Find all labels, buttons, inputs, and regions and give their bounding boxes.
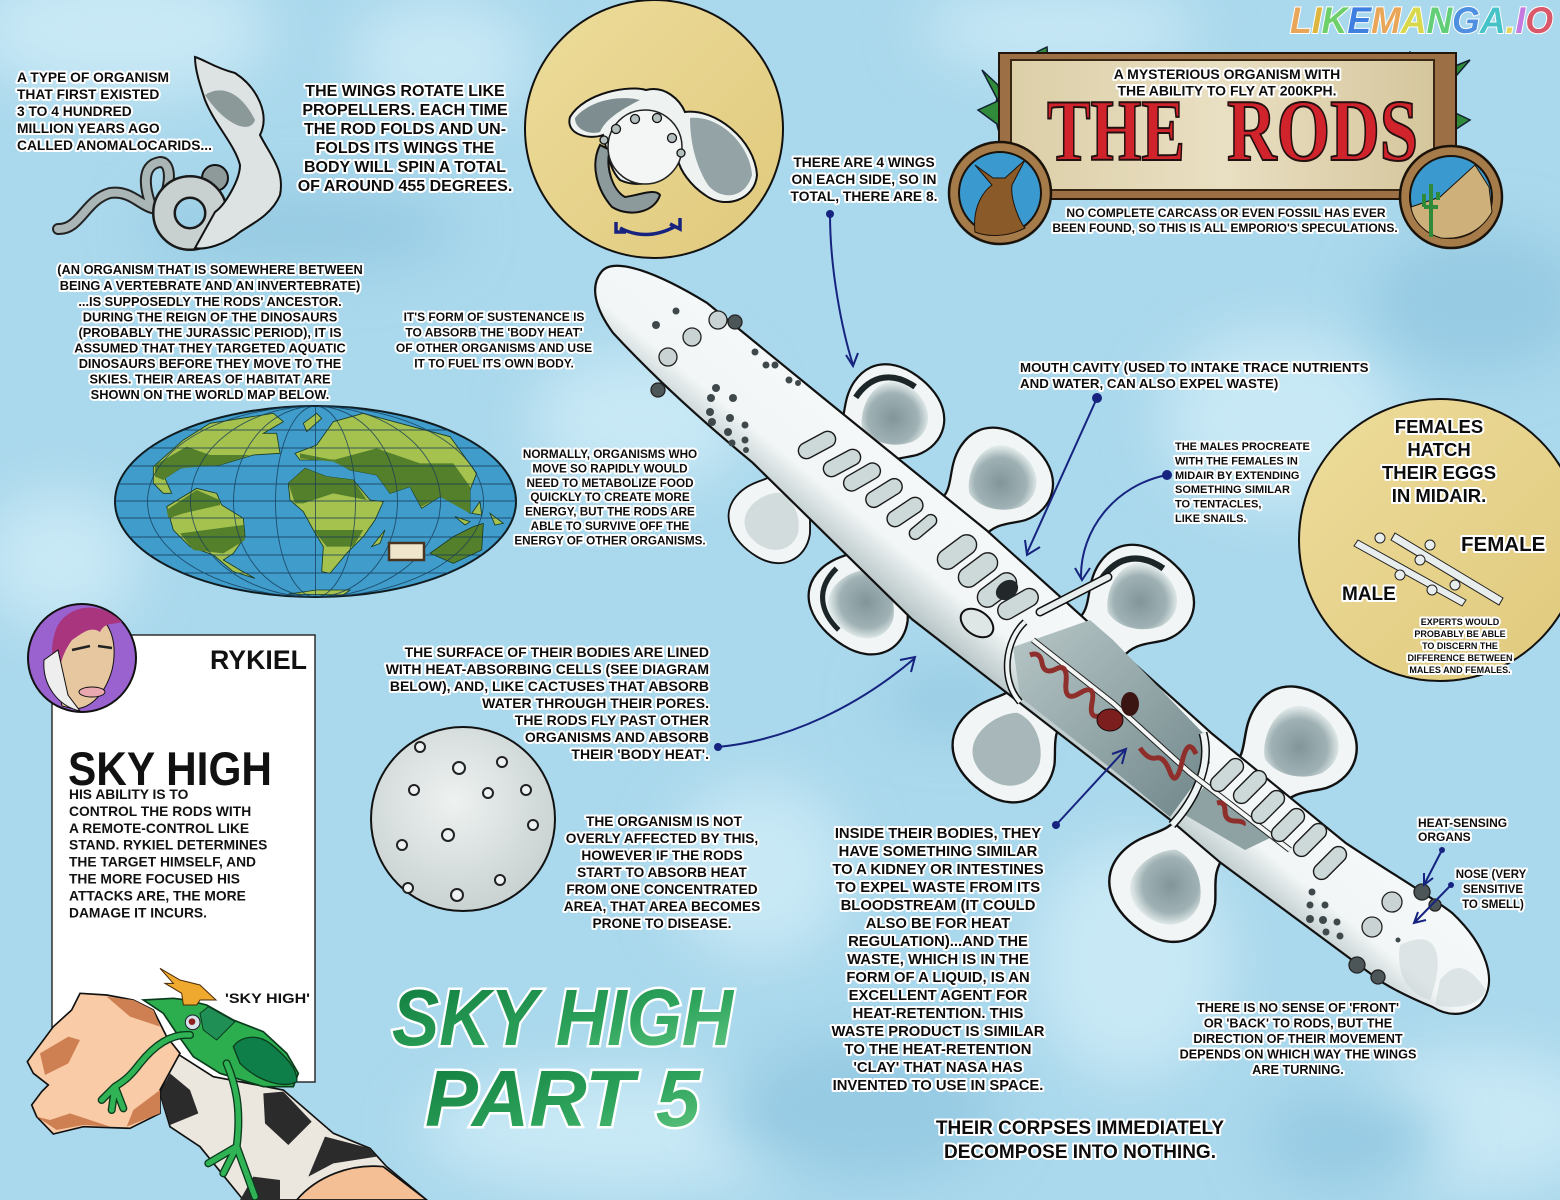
rod underside shading xyxy=(1399,939,1486,1007)
title: sky high part 5: SKY HIGH xyxy=(392,973,735,1062)
text: 4 wings: TOTAL, THERE ARE 8. xyxy=(791,189,937,204)
text: ancestor: DURING THE REIGN OF THE DINOSAURS xyxy=(83,310,338,324)
text: experts: PROBABLY BE ABLE xyxy=(1414,629,1506,639)
text: no complete carcass: BEEN FOUND, SO THIS IS ALL EMPORIO'S SPECULATIONS. xyxy=(1052,221,1398,235)
text: surface of bodies: THE RODS FLY PAST OTHER xyxy=(515,712,709,728)
text: inside bodies: HAVE SOMETHING SIMILAR xyxy=(839,844,1038,860)
arrow: inside xyxy=(1052,749,1126,829)
text: inside bodies: EXCELLENT AGENT FOR xyxy=(849,988,1028,1004)
text: sustenance: TO ABSORB THE 'BODY HEAT' xyxy=(405,326,583,340)
text: inside bodies: WASTE PRODUCT IS SIMILAR xyxy=(832,1024,1045,1040)
title: the rods: THE xyxy=(1047,83,1185,180)
text: ability: ATTACKS ARE, THE MORE xyxy=(69,888,246,903)
panel: females circle xyxy=(1299,399,1560,681)
heading: sky high: SKY HIGH xyxy=(68,742,272,795)
text: metabolism: ABLE TO SURVIVE OFF THE xyxy=(531,520,690,533)
text: surface of bodies: THE SURFACE OF THEIR BODIES ARE LINED xyxy=(405,644,709,660)
title: the rods: RODS xyxy=(1227,83,1418,180)
text: sustenance: IT'S FORM OF SUSTENANCE IS xyxy=(404,310,584,324)
text: wings rotate: FOLDS ITS WINGS THE xyxy=(316,140,495,157)
text: wings rotate: PROPELLERS. EACH TIME xyxy=(302,102,508,119)
title: the rods xyxy=(1047,83,1418,180)
rod wings and body xyxy=(497,163,1560,1128)
text: 4 wings: THERE ARE 4 WINGS xyxy=(793,155,935,170)
text: surface of bodies: THEIR 'BODY HEAT'. xyxy=(571,746,709,762)
fist xyxy=(27,993,180,1134)
text: disease: FROM ONE CONCENTRATED xyxy=(566,882,758,897)
text: disease: PRONE TO DISEASE. xyxy=(593,916,731,931)
map grid xyxy=(115,406,516,597)
text: metabolism: NEED TO METABOLIZE FOOD xyxy=(526,477,694,490)
text: corpses: THEIR CORPSES IMMEDIATELY xyxy=(936,1118,1224,1139)
sleeve xyxy=(160,1053,427,1200)
text: ancestor: DINOSAURS BEFORE THEY MOVE TO THE xyxy=(79,356,342,371)
wing: bottom 3 xyxy=(935,668,1087,821)
text: sustenance: OF OTHER ORGANISMS AND USE xyxy=(396,341,592,355)
text: males procreate: WITH THE FEMALES IN xyxy=(1175,455,1298,467)
world map xyxy=(115,406,516,597)
arrow: tentacles xyxy=(1075,470,1172,580)
arrow: surface xyxy=(714,657,915,751)
text: corpses: DECOMPOSE INTO NOTHING. xyxy=(944,1142,1216,1163)
text: metabolism: ENERGY, BUT THE RODS ARE xyxy=(525,506,695,519)
text: ancestor: SKIES. THEIR AREAS OF HABITAT ARE xyxy=(89,372,331,386)
icon: folded rod seen head-on xyxy=(569,88,757,213)
title: sky high part 5: PART 5 xyxy=(425,1054,701,1143)
text: mouth cavity: MOUTH CAVITY (USED TO INTAKE TRACE NUTRIENTS xyxy=(1020,360,1369,375)
text: front or back: OR 'BACK' TO RODS, BUT THE xyxy=(1204,1016,1392,1030)
text: surface of bodies: WATER THROUGH THEIR PORES. xyxy=(482,695,709,711)
panel: rykiel card xyxy=(52,635,315,1082)
text: metabolism: ENERGY OF OTHER ORGANISMS. xyxy=(514,534,706,547)
heading: females hatch: THEIR EGGS xyxy=(1382,462,1496,483)
text: experts: TO DISCERN THE xyxy=(1422,641,1498,651)
text: inside bodies: HEAT-RETENTION. THIS xyxy=(853,1006,1023,1022)
text: wings rotate: BODY WILL SPIN A TOTAL xyxy=(304,159,506,176)
wing: top 2 xyxy=(925,410,1070,555)
text: males procreate: LIKE SNAILS. xyxy=(1175,513,1247,525)
text: inside bodies: INSIDE THEIR BODIES, THEY xyxy=(835,826,1041,842)
arrow: rotation xyxy=(616,218,680,235)
watermark logo: LIKEMANGA.IO xyxy=(1290,0,1553,41)
text: anomalocarid intro: A TYPE OF ORGANISM xyxy=(17,70,169,85)
heading: females hatch: HATCH xyxy=(1407,439,1471,460)
text: inside bodies: WASTE, WHICH IS IN THE xyxy=(847,952,1029,968)
icon: mating rods xyxy=(1354,533,1503,606)
text: wings rotate: THE ROD FOLDS AND UN- xyxy=(304,121,506,138)
text: ability: HIS ABILITY IS TO xyxy=(69,787,189,802)
stand horn xyxy=(160,968,216,1005)
text: heat sensing: ORGANS xyxy=(1418,830,1471,844)
text: mouth cavity: AND WATER, CAN ALSO EXPEL WASTE) xyxy=(1020,376,1278,391)
rod scales xyxy=(652,308,1400,942)
text: front or back: DIRECTION OF THEIR MOVEMENT xyxy=(1193,1032,1403,1046)
sign plank xyxy=(1011,60,1434,190)
text: no complete carcass: NO COMPLETE CARCASS OR EVEN FOSSIL HAS EVER xyxy=(1066,206,1386,220)
text: experts: DIFFERENCE BETWEEN xyxy=(1407,653,1513,663)
heading: females hatch: IN MIDAIR. xyxy=(1392,485,1486,506)
text: inside bodies: TO THE HEAT-RETENTION xyxy=(845,1042,1031,1058)
wing: top 4 xyxy=(1216,667,1375,826)
map inset xyxy=(389,543,424,560)
arrow: wings note xyxy=(826,210,858,366)
text: wings rotate: OF AROUND 455 DEGREES. xyxy=(298,178,512,195)
text: disease: START TO ABSORB HEAT xyxy=(577,865,748,880)
text: experts: MALES AND FEMALES. xyxy=(1409,665,1511,675)
text: experts: EXPERTS WOULD xyxy=(1421,617,1500,627)
arrow: nose xyxy=(1414,882,1454,923)
text: males procreate: THE MALES PROCREATE xyxy=(1175,441,1310,453)
text: disease: AREA, THAT AREA BECOMES xyxy=(564,899,760,914)
text: disease: HOWEVER IF THE RODS xyxy=(581,848,743,863)
text: ancestor: ...IS SUPPOSEDLY THE RODS' ANCESTOR. xyxy=(78,294,342,309)
rod cutaway interior xyxy=(1007,620,1290,850)
vines xyxy=(978,47,1470,145)
text: inside bodies: ALSO BE FOR HEAT xyxy=(866,916,1010,932)
text: wings rotate: THE WINGS ROTATE LIKE xyxy=(305,83,505,100)
text: front or back: ARE TURNING. xyxy=(1252,1063,1344,1077)
illustration: anomalocarid worm xyxy=(58,57,281,248)
text: males procreate: TO TENTACLES, xyxy=(1175,499,1261,511)
text: heat sensing: HEAT-SENSING xyxy=(1418,816,1507,830)
text: surface of bodies: BELOW), AND, LIKE CACTUSES THAT ABSORB xyxy=(390,678,709,694)
text: ancestor: (AN ORGANISM THAT IS SOMEWHERE BETWEEN xyxy=(57,262,363,277)
text: anomalocarid intro: CALLED ANOMALOCARIDS... xyxy=(17,138,212,153)
text: anomalocarid intro: THAT FIRST EXISTED xyxy=(17,87,159,102)
icon: desert medallion xyxy=(1400,146,1502,248)
rod side lump xyxy=(955,603,999,643)
sign frame xyxy=(999,53,1456,199)
text: males procreate: MIDAIR BY EXTENDING xyxy=(1175,470,1299,482)
text: inside bodies: TO EXPEL WASTE FROM ITS xyxy=(836,880,1040,896)
label: female: FEMALE xyxy=(1461,533,1545,556)
illustration: fist and sleeve xyxy=(27,968,427,1200)
text: sustenance: IT TO FUEL ITS OWN BODY. xyxy=(414,356,574,370)
arrow: heat sensing xyxy=(1424,847,1445,885)
text: ability: THE TARGET HIMSELF, AND xyxy=(69,855,256,870)
wing: bottom 4 xyxy=(1091,803,1248,961)
text: males procreate: SOMETHING SIMILAR xyxy=(1175,484,1290,496)
text: ancestor: (PROBABLY THE JURASSIC PERIOD), IT IS xyxy=(78,325,342,340)
text: ability: STAND. RYKIEL DETERMINES xyxy=(69,838,267,853)
banner text top: A MYSTERIOUS ORGANISM WITH xyxy=(1114,66,1340,82)
arrow: mouth cavity xyxy=(1025,393,1102,555)
text: anomalocarid intro: 3 TO 4 HUNDRED xyxy=(17,104,132,119)
illustration: the rod xyxy=(497,163,1560,1128)
cell bumps xyxy=(397,742,538,901)
rod tentacle xyxy=(1040,577,1108,612)
wing: top 1 xyxy=(819,347,961,489)
banner text top: THE ABILITY TO FLY AT 200KPH. xyxy=(1117,82,1337,98)
rod mouth xyxy=(992,576,1022,604)
rod body xyxy=(557,235,1514,1055)
title: sky high part 5 xyxy=(392,973,735,1143)
text: metabolism: MOVE SO RAPIDLY WOULD xyxy=(532,462,688,475)
text: ancestor: ASSUMED THAT THEY TARGETED AQUATIC xyxy=(74,340,346,356)
wing: bottom 1 xyxy=(714,457,835,578)
text: inside bodies: 'CLAY' THAT NASA HAS xyxy=(853,1060,1023,1076)
text: disease: OVERLY AFFECTED BY THIS, xyxy=(566,831,758,846)
text: surface of bodies: WITH HEAT-ABSORBING CELLS (SEE DIAGRAM xyxy=(386,661,709,677)
label: male: MALE xyxy=(1342,584,1396,605)
panel: wing rotation circle xyxy=(525,0,783,258)
banner: the rods xyxy=(949,47,1502,248)
text: front or back: THERE IS NO SENSE OF 'FRONT' xyxy=(1197,1001,1399,1015)
text: disease: THE ORGANISM IS NOT xyxy=(586,814,743,829)
rod bumps xyxy=(651,311,1441,984)
text: front or back: DEPENDS ON WHICH WAY THE WINGS xyxy=(1180,1048,1416,1062)
text: inside bodies: BLOODSTREAM (IT COULD xyxy=(841,898,1036,914)
text: inside bodies: INVENTED TO USE IN SPACE. xyxy=(833,1078,1043,1094)
text: 4 wings: ON EACH SIDE, SO IN xyxy=(792,172,936,187)
text: surface of bodies: ORGANISMS AND ABSORB xyxy=(525,729,709,745)
text: ability: CONTROL THE RODS WITH xyxy=(69,804,251,819)
text: metabolism: QUICKLY TO CREATE MORE xyxy=(530,491,690,504)
icon: deer medallion xyxy=(949,142,1051,244)
heading: females hatch: FEMALES xyxy=(1395,416,1483,437)
name: rykiel: RYKIEL xyxy=(210,645,307,675)
text: ability: A REMOTE-CONTROL LIKE xyxy=(69,821,249,836)
portrait: rykiel xyxy=(28,604,136,712)
text: ancestor: SHOWN ON THE WORLD MAP BELOW. xyxy=(91,387,329,402)
label: sky high stand: 'SKY HIGH' xyxy=(225,990,310,1006)
wing: top 3 xyxy=(1062,527,1212,676)
text: inside bodies: TO A KIDNEY OR INTESTINES xyxy=(832,862,1044,878)
text: anomalocarid intro: MILLION YEARS AGO xyxy=(17,121,160,136)
text: nose: TO SMELL) xyxy=(1462,899,1524,911)
text: ancestor: BEING A VERTEBRATE AND AN INVERTEBRATE) xyxy=(60,278,360,293)
landmasses xyxy=(153,413,503,595)
text: inside bodies: REGULATION)...AND THE xyxy=(848,934,1028,950)
diagram: heat-absorbing cells circle xyxy=(371,727,555,911)
text: nose: SENSITIVE xyxy=(1463,884,1523,896)
text: inside bodies: FORM OF A LIQUID, IS AN xyxy=(846,970,1030,986)
text: metabolism: NORMALLY, ORGANISMS WHO xyxy=(523,448,697,461)
wing: bottom 2 xyxy=(792,527,938,672)
text: ability: THE MORE FOCUSED HIS xyxy=(69,872,240,886)
stand: sky high beetle xyxy=(102,998,298,1197)
text: nose: NOSE (VERY xyxy=(1456,869,1527,881)
text: ability: DAMAGE IT INCURS. xyxy=(69,905,207,920)
rod gill slots xyxy=(796,429,1350,883)
